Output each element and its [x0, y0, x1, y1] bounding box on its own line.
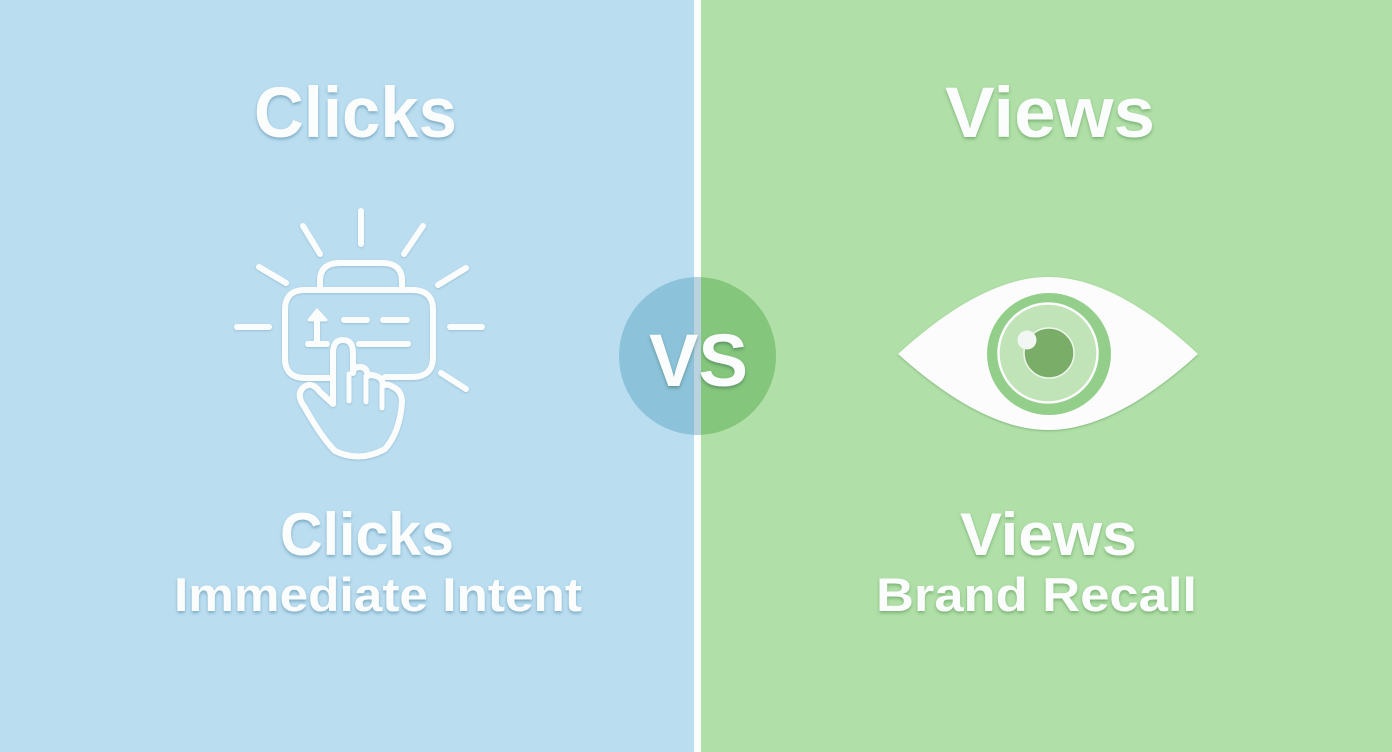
VS text: VS — [649, 319, 748, 402]
badge left half — [619, 277, 694, 435]
badge right half — [701, 277, 776, 435]
icon: eye — [898, 277, 1198, 430]
iris inner — [998, 304, 1098, 402]
radiating lines — [237, 211, 482, 389]
pupil — [1024, 328, 1074, 378]
button text lines — [344, 320, 408, 344]
label: Immediate Intent: Immediate Intent — [174, 568, 582, 621]
heading: Views: Views — [945, 74, 1155, 153]
heading: Clicks: Clicks — [254, 74, 457, 153]
button handle — [320, 263, 402, 288]
label: Views: Views — [960, 501, 1137, 568]
button card — [285, 290, 433, 378]
icon: hand clicking a button with radiating lines — [237, 211, 482, 457]
center divider — [694, 0, 701, 752]
VS badge — [619, 277, 776, 435]
label: Brand Recall: Brand Recall — [876, 568, 1197, 621]
iris outer ring — [987, 293, 1111, 415]
up arrow — [308, 310, 327, 344]
label: Clicks: Clicks — [280, 501, 454, 568]
pointing hand — [300, 340, 402, 457]
badge over divider — [694, 277, 701, 435]
eye white — [898, 277, 1198, 430]
panel: clicks background — [0, 0, 694, 752]
highlight — [1018, 330, 1036, 350]
panel: views background — [701, 0, 1392, 752]
